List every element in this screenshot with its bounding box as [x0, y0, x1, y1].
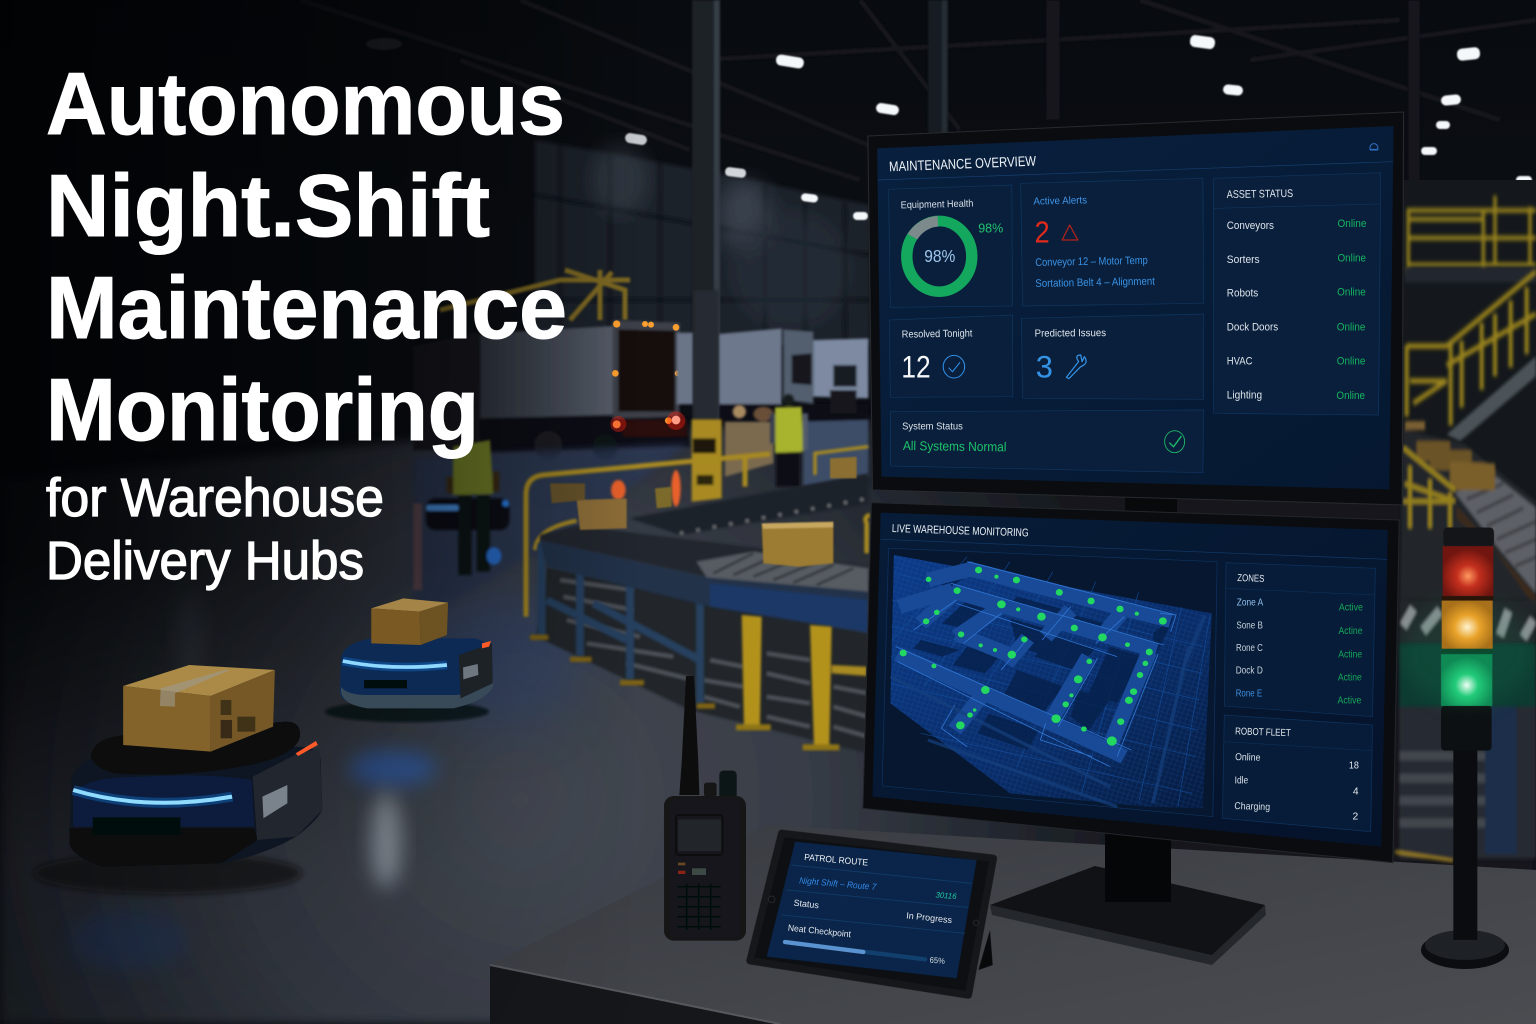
- subtitle: for Warehouse: [46, 468, 384, 528]
- dark map cells: [914, 572, 1174, 750]
- truck lights: [610, 320, 685, 432]
- title: Monitoring: [46, 360, 479, 459]
- panel: zones: Active: [1339, 603, 1363, 614]
- subtitle: Delivery Hubs: [46, 531, 364, 591]
- conveyor with boxes: [1400, 421, 1536, 609]
- floor reflections: [70, 590, 585, 970]
- panel: system status: System Status: [902, 421, 963, 432]
- panel: active alerts: [1021, 178, 1204, 306]
- tablet: patrol route: Status: [793, 898, 820, 910]
- panel: robot fleet: Online: [1235, 752, 1261, 764]
- panel: equipment health: [889, 185, 1012, 307]
- panel: resolved tonight: [889, 315, 1013, 397]
- panel: zones: Dock D: [1236, 666, 1263, 677]
- right side mezzanine and conveyor: [1395, 180, 1536, 861]
- panel: active alerts: Conveyor 12 – Motor Temp: [1035, 255, 1148, 269]
- worker: far conveyor: [770, 394, 808, 487]
- panel: robot fleet: ROBOT FLEET: [1235, 727, 1291, 739]
- panel: zones: Actine: [1338, 650, 1362, 660]
- panel: asset status: Online: [1337, 356, 1365, 368]
- panel: asset status: ASSET STATUS: [1227, 188, 1294, 201]
- yellow stair railing: [1407, 272, 1536, 426]
- panel: asset status: Sorters: [1227, 254, 1260, 266]
- truck: rear dock trailer: [413, 320, 690, 459]
- panel: asset status: Conveyors: [1227, 220, 1274, 232]
- map aisles: [897, 568, 1171, 757]
- panel: system status: [890, 410, 1204, 473]
- dashboard heading: MAINTENANCE OVERVIEW: [889, 154, 1037, 175]
- panel: asset status: Lighting: [1227, 390, 1262, 401]
- icon: warning triangle: [1062, 225, 1078, 240]
- desk: [490, 825, 1536, 1024]
- panel: zones: Zone A: [1237, 598, 1263, 608]
- monitoring screen: [872, 513, 1388, 847]
- tablet: patrol route: 30116: [935, 890, 957, 901]
- panel: asset status: Online: [1337, 287, 1366, 299]
- roller conveyor and lower floor: [1395, 600, 1536, 861]
- panel: robot fleet: Charging: [1234, 801, 1270, 813]
- ceiling lights: [366, 34, 1532, 220]
- stack light base: [1421, 930, 1509, 969]
- panel: robot fleet: 18: [1349, 760, 1359, 771]
- icon: check circle: [943, 355, 965, 378]
- panel: asset status: Online: [1336, 390, 1365, 402]
- panel: zones: Rone C: [1236, 643, 1263, 654]
- progress bar: [785, 942, 925, 959]
- panel: warehouse map: [882, 548, 1217, 817]
- front conveyor: [540, 526, 868, 633]
- left dark vignette: [0, 0, 640, 1024]
- worker: left aisle with background robot: [413, 440, 509, 590]
- monitor stand: [990, 494, 1266, 965]
- robot: rear delivery robot: [325, 598, 493, 722]
- panel: resolved tonight: 12: [901, 350, 931, 384]
- subtitle: [46, 468, 384, 591]
- robot position dots: [900, 567, 1167, 746]
- panel: robot fleet: Idle: [1235, 776, 1248, 786]
- panel: zones: Rone E: [1236, 689, 1262, 699]
- panel: asset status: Online: [1337, 218, 1366, 230]
- columns: [692, 0, 1420, 420]
- panel: zones: ZONES: [1237, 573, 1265, 585]
- yellow conveyor legs: [736, 615, 867, 747]
- monitor bezel: [868, 112, 1404, 505]
- tablet: patrol route: In Progress: [906, 910, 953, 925]
- monitor bezel: [863, 503, 1399, 863]
- dashboard screen: [877, 126, 1394, 489]
- yellow guard rail: [526, 447, 870, 617]
- panel: robot fleet: 2: [1352, 811, 1358, 822]
- conveyor boxes: [550, 457, 857, 567]
- panel: predicted issues: [1021, 314, 1204, 399]
- stair slab: [1447, 356, 1536, 441]
- panel: equipment health: 98%: [924, 247, 955, 266]
- donut gauge: [907, 221, 972, 292]
- panel: asset status: Dock Doors: [1227, 322, 1278, 334]
- icon: green check: [1165, 431, 1185, 453]
- tablet: patrol route: PATROL ROUTE: [804, 852, 868, 868]
- panel: active alerts: Active Alerts: [1033, 195, 1087, 208]
- panel: asset status: HVAC: [1227, 356, 1252, 367]
- support column: [693, 290, 719, 421]
- monitor: live warehouse monitoring: [863, 503, 1399, 863]
- under-conveyor floor grating: [537, 567, 868, 753]
- title: [46, 54, 567, 591]
- panel: asset status: Online: [1337, 253, 1366, 264]
- icon: wrench: [1066, 355, 1086, 379]
- panel: zones: Actine: [1339, 626, 1363, 637]
- panel: system status: All Systems Normal: [903, 438, 1007, 454]
- orange reflections: [611, 470, 681, 507]
- panel: zones: [1224, 563, 1375, 717]
- robot: front delivery robot: [34, 665, 322, 894]
- tablet: patrol route: Neat Checkpoint: [787, 923, 852, 939]
- tablet stand: [978, 930, 993, 970]
- stack light: [1401, 527, 1534, 940]
- yellow back mezzanine: [440, 270, 630, 320]
- panel: asset status: Online: [1337, 322, 1365, 333]
- panel: zones: Sone B: [1236, 621, 1263, 631]
- panel: zones: Active: [1337, 696, 1362, 707]
- title: Maintenance: [46, 258, 567, 357]
- tablet: patrol route: [750, 833, 993, 995]
- back conveyor: [630, 473, 868, 535]
- ceiling trusses: [300, 0, 1536, 180]
- user icon: [1370, 144, 1378, 150]
- monitoring heading: LIVE WAREHOUSE MONITORING: [892, 522, 1029, 539]
- panel: zones: Actine: [1338, 673, 1362, 683]
- panel: predicted issues: Predicted Issues: [1035, 327, 1106, 340]
- warehouse wall: [535, 140, 870, 420]
- yellow platform railing: [1407, 196, 1536, 274]
- title: Night.Shift: [46, 156, 490, 255]
- loading dock scene: [413, 290, 870, 753]
- floor: [0, 420, 1536, 1024]
- panel: resolved tonight: Resolved Tonight: [902, 328, 973, 341]
- monitor: maintenance overview: [868, 112, 1404, 505]
- panel: robot fleet: [1222, 715, 1372, 832]
- conveyor legs blue: [542, 543, 700, 703]
- tablet: patrol route: Night Shift – Route 7: [799, 875, 878, 892]
- panel: robot fleet: 4: [1353, 786, 1359, 797]
- panel: asset status: Robots: [1227, 288, 1258, 300]
- radio handset: [664, 676, 746, 941]
- panel: active alerts: 2: [1035, 215, 1050, 249]
- panel: asset status: [1214, 173, 1381, 415]
- panel: active alerts: Sortation Belt 4 – Alignment: [1035, 276, 1156, 290]
- panel: equipment health: Equipment Health: [900, 199, 974, 211]
- truck: second trailer row: [677, 328, 868, 487]
- panel: predicted issues: 3: [1036, 350, 1053, 384]
- yellow machine and pallets: [692, 405, 773, 502]
- floor left dock tint: [413, 443, 690, 623]
- title: Autonomous: [46, 54, 565, 153]
- conveyor feet: [530, 637, 715, 706]
- tablet: patrol route: 65%: [929, 955, 946, 966]
- panel: equipment health: 98%: [978, 221, 1004, 236]
